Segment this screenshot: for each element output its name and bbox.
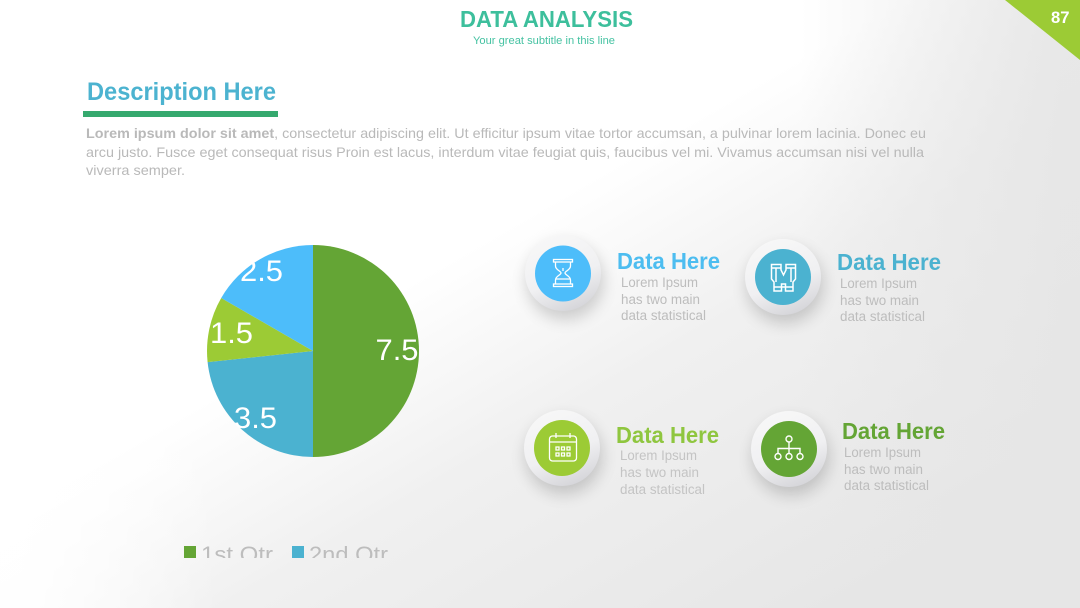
item 1: hourglass bbox=[525, 235, 720, 323]
item 2: binoculars bbox=[745, 239, 941, 324]
item 4: hierarchy bbox=[751, 411, 945, 495]
body text: Lorem Ipsum bbox=[620, 448, 697, 463]
icon: calendar badge bbox=[524, 410, 602, 494]
body text: Lorem Ipsum bbox=[844, 445, 921, 460]
description text block bbox=[86, 125, 926, 178]
heading: description: Description Here bbox=[87, 78, 276, 106]
body text: has two main bbox=[620, 465, 699, 480]
slice: 4th Qtr 2.5 bbox=[221, 245, 313, 351]
pie chart bbox=[207, 245, 419, 457]
icon: hourglass badge bbox=[525, 235, 603, 319]
body text: has two main bbox=[844, 462, 923, 477]
body text bbox=[844, 445, 929, 493]
body text: has two main bbox=[840, 293, 919, 308]
heading: Data Here bbox=[616, 422, 719, 448]
body text: data statistical bbox=[620, 482, 705, 497]
item 3: calendar bbox=[524, 410, 719, 497]
corner tab with page number bbox=[1005, 0, 1080, 60]
heading: Data Here bbox=[837, 249, 941, 275]
slice: 2nd Qtr 3.5 bbox=[208, 351, 313, 457]
description text block: arcu justo. Fusce eget consequat risus Proin est lacus, interdum vitae feugiat quis, faucibus vel mi. Vivamus accumsan nisi vel nulla bbox=[86, 144, 924, 160]
chart legend: 1st Qtr bbox=[201, 542, 273, 567]
body text: has two main bbox=[621, 292, 700, 307]
heading: Data Here bbox=[617, 248, 720, 274]
label: 3.5: 3.5 bbox=[234, 402, 277, 435]
label: 1.5: 1.5 bbox=[210, 317, 253, 350]
corner tab with page number: 87 bbox=[1051, 9, 1070, 27]
heading: description bbox=[83, 78, 278, 117]
label: 7.5: 7.5 bbox=[376, 334, 418, 367]
description text block: Lorem ipsum dolor sit amet , consectetur adipiscing elit. Ut efficitur ipsum vitae tortor accumsan, a pulvinar lorem lacinia. Donec eu bbox=[86, 125, 926, 141]
slice: 1st Qtr 7.5 bbox=[313, 245, 419, 457]
icon: hierarchy badge bbox=[751, 411, 829, 495]
body text bbox=[620, 448, 705, 497]
title: DATA ANALYSIS bbox=[460, 6, 633, 32]
body text: Lorem Ipsum bbox=[840, 276, 917, 291]
body text bbox=[840, 276, 925, 324]
chart legend: 2nd Qtr bbox=[309, 542, 388, 567]
subtitle: Your great subtitle in this line bbox=[473, 35, 615, 47]
body text: data statistical bbox=[840, 309, 925, 324]
body text: data statistical bbox=[621, 308, 706, 323]
label: 2.5: 2.5 bbox=[240, 255, 283, 288]
body text: data statistical bbox=[844, 478, 929, 493]
icon: binoculars badge bbox=[745, 239, 823, 323]
chart legend bbox=[184, 546, 388, 558]
heading: Data Here bbox=[842, 418, 945, 444]
slice: 3rd Qtr 1.5 bbox=[207, 298, 313, 362]
body text bbox=[621, 275, 706, 323]
body text: Lorem Ipsum bbox=[621, 275, 698, 290]
description text block: viverra semper. bbox=[86, 162, 185, 178]
